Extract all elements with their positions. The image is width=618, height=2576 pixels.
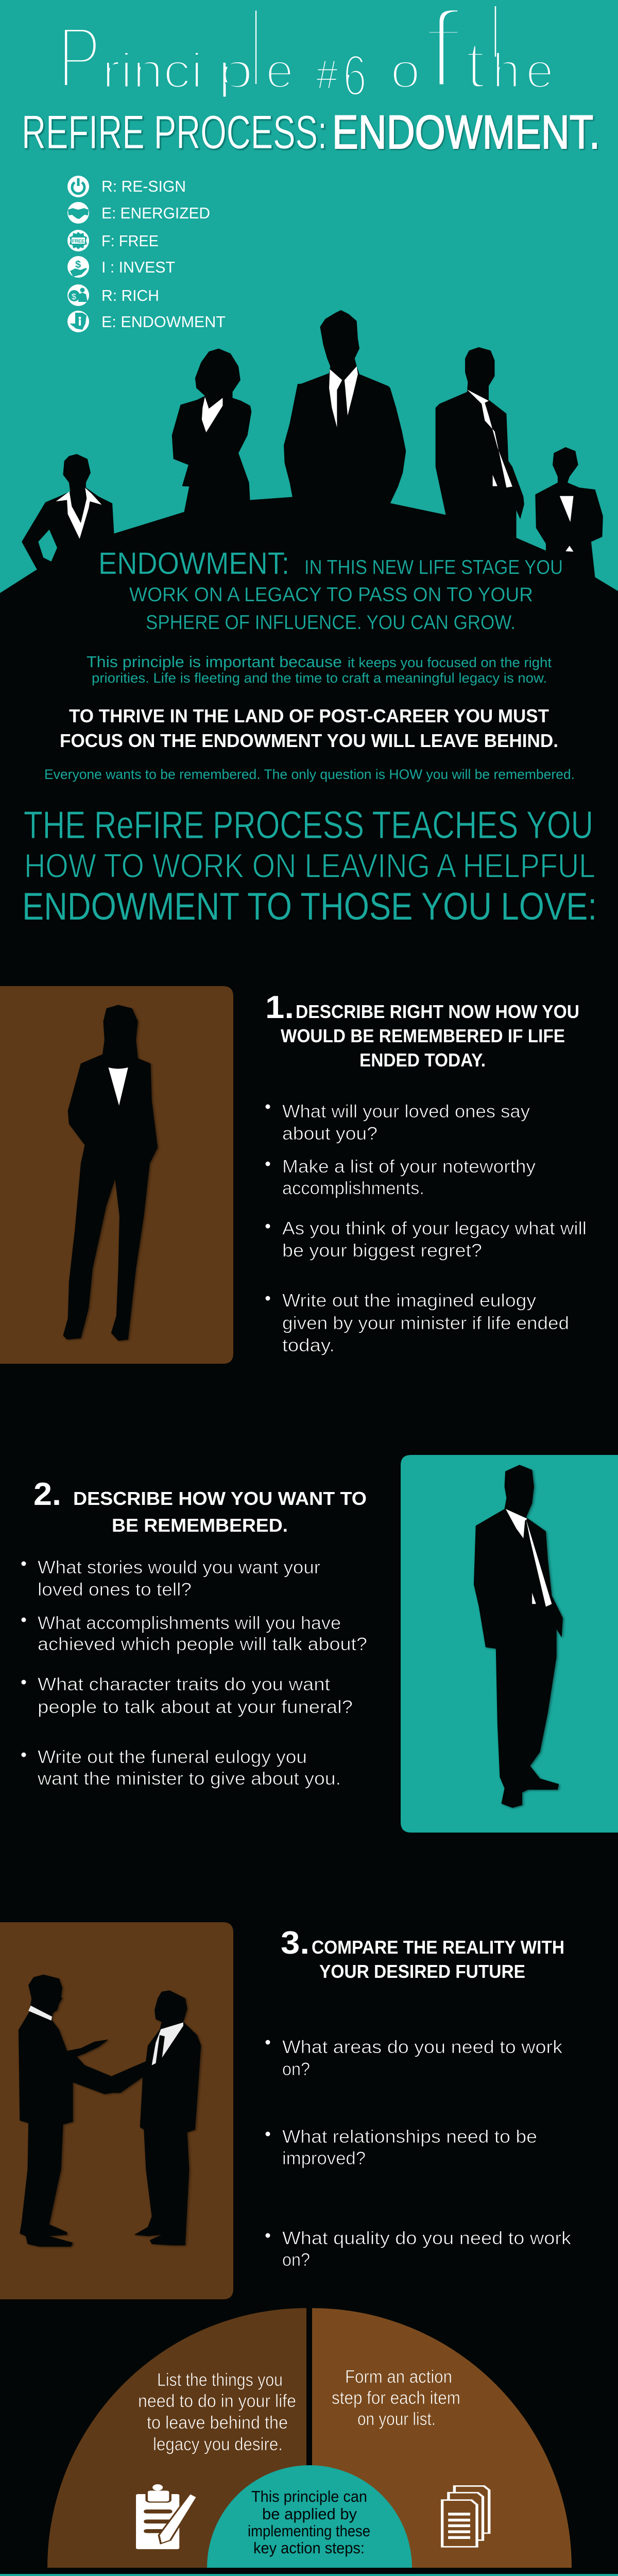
silhouette: man with long tie (436, 347, 524, 546)
icon: dollar and person (67, 284, 89, 306)
text: form an action step: step for each item (332, 2388, 460, 2408)
list: step 2 bullets: What character traits do you want (38, 1674, 330, 1694)
list: step 2 bullets: Write out the funeral eulogy you (38, 1747, 307, 1767)
text: list the things you need to do: List the things you (157, 2370, 283, 2390)
icon: handshake (67, 202, 89, 224)
title: Principle #6 of the: P (58, 9, 101, 107)
icon: hand holding person (67, 311, 89, 332)
section: step 1 text (265, 990, 587, 1355)
section: step 2 text (22, 1477, 367, 1789)
list: step 1 bullets: about you? (282, 1124, 377, 1144)
illustration: business people standing on a dome (0, 310, 618, 633)
footer bar (0, 2574, 618, 2576)
silhouette: central man (284, 310, 406, 503)
callout: thrive in post-career: TO THRIVE IN THE LAND OF POST-CAREER YOU MUST (69, 705, 549, 726)
list: step 1 bullets: Make a list of your noteworthy (282, 1157, 536, 1177)
title: Principle #6 of the: rinci (102, 43, 203, 98)
list: the six ReFIRE principles (67, 176, 226, 332)
text: list the things you need to do (138, 2370, 296, 2454)
title: ReFire Process: Endowment: REFIRE PROCESS: (22, 106, 327, 159)
title: Principle #6 of the: o (390, 43, 420, 98)
heading: step 1: WOULD BE REMEMBERED IF LIFE (281, 1025, 565, 1046)
list: step 3 bullets: on? (282, 2250, 310, 2270)
text: definition line two: WORK ON A LEGACY TO PASS ON TO YOUR (129, 584, 533, 606)
list: step 1 bullets: be your biggest regret? (282, 1241, 482, 1261)
label: Re-sign: R: RE-SIGN (101, 177, 186, 195)
silhouette: two men shaking hands (19, 1975, 201, 2247)
heading: step 2: DESCRIBE HOW YOU WANT TO (73, 1488, 367, 1509)
text: everyone wants to be remembered: Everyone wants to be remembered. The only question is HOW you will be remembered. (44, 767, 575, 782)
title: Principle #6 of the: e (266, 43, 294, 98)
silhouette: standing man with tie (474, 1465, 563, 1808)
list: step 1 bullets (266, 1101, 587, 1355)
heading: Endowment: ENDOWMENT: (98, 546, 289, 581)
list: step 1 bullets: Write out the imagined eulogy (282, 1291, 537, 1311)
silhouette: left woman (22, 454, 114, 570)
list: step 3 bullets (266, 2037, 572, 2270)
text: this principle can be applied: key action steps: (253, 2539, 365, 2557)
text: this principle can be applied: This principle can (251, 2487, 367, 2505)
text: definition line one: IN THIS NEW LIFE STAGE YOU (304, 556, 563, 579)
section: step 3 text (266, 1925, 572, 2270)
text: this principle can be applied: implementing these (248, 2522, 370, 2540)
icon: power button (67, 176, 89, 197)
chart: action steps dome (47, 2308, 572, 2568)
title: Principle #6 of the: h (492, 43, 520, 98)
text: this principle can be applied: be applied by (262, 2505, 357, 2523)
text: definition line three: SPHERE OF INFLUENCE. YOU CAN GROW. (146, 612, 516, 634)
list: step 1 bullets: As you think of your legacy what will (282, 1218, 587, 1239)
title: Principle #6 of the: p (217, 43, 253, 98)
list: step 1 bullets: accomplishments. (282, 1178, 424, 1198)
heading: step 3 (281, 1925, 564, 1982)
title: Principle #6 of the: t (466, 27, 485, 102)
title: Principle #6 of the: e (526, 43, 554, 98)
list: step 1 bullets: today. (282, 1335, 335, 1355)
label: Free: F: FREE (101, 232, 159, 250)
callout: thrive in post-career (60, 705, 558, 751)
icon: free badge (67, 230, 89, 251)
list: step 2 bullets: want the minister to give about you. (37, 1769, 341, 1789)
callout: thrive in post-career: FOCUS ON THE ENDOWMENT YOU WILL LEAVE BEHIND. (60, 730, 558, 751)
label: Energized: E: ENERGIZED (101, 204, 210, 222)
text: why this principle is important (87, 653, 552, 686)
list: step 1 bullets: What will your loved ones say (282, 1101, 530, 1122)
label: Invest: I : INVEST (101, 258, 175, 276)
text: form an action step: Form an action (345, 2367, 452, 2387)
heading: step 1 (265, 990, 579, 1071)
icon: stack of documents (442, 2486, 489, 2547)
list: step 2 bullets: achieved which people will talk about? (38, 1634, 367, 1654)
list: step 3 bullets: improved? (282, 2148, 366, 2168)
text: list the things you need to do: to leave behind the (147, 2413, 288, 2433)
heading: step 2 (33, 1477, 367, 1536)
list: step 2 bullets (22, 1557, 367, 1789)
text: form an action step: on your list. (357, 2409, 436, 2429)
heading: step 1: ENDED TODAY. (359, 1049, 486, 1071)
heading: the ReFIRE process teaches you (22, 803, 597, 928)
icon: dollar and person: $ (72, 293, 76, 301)
panel: teal header background (0, 0, 618, 603)
list: step 3 bullets: What quality do you need to work (282, 2228, 572, 2248)
panel: step 2 image (401, 1455, 618, 1833)
label: Rich: R: RICH (101, 286, 159, 304)
list: step 2 bullets: What accomplishments will you have (38, 1613, 341, 1633)
list: step 2 bullets: people to talk about at your funeral? (38, 1697, 353, 1717)
silhouette: standing woman (63, 1005, 158, 1341)
icon: free badge: FREE (72, 239, 84, 244)
icon: hand with dollar: $ (75, 259, 81, 270)
panel: teal semicircle (207, 2465, 412, 2568)
list: step 3 bullets: What relationships need to be (282, 2127, 537, 2147)
heading: step 3: COMPARE THE REALITY WITH (312, 1937, 564, 1958)
title: Principle #6 of the: # (316, 52, 338, 97)
heading: step 1: DESCRIBE RIGHT NOW HOW YOU (296, 1001, 579, 1022)
heading: step 3: YOUR DESIRED FUTURE (319, 1961, 525, 1982)
text: list the things you need to do: need to do in your life (138, 2391, 296, 2411)
text: why this principle is important: it keeps you focused on the right (348, 655, 552, 670)
silhouette: right woman (535, 447, 603, 585)
text: why this principle is important: priorities. Life is fleeting and the time to craft a meaningful legacy is now. (92, 670, 547, 686)
list: step 3 bullets: on? (282, 2059, 310, 2079)
list: step 1 bullets: given by your minister if life ended (282, 1313, 569, 1333)
panel: step 1 image (0, 986, 233, 1364)
heading: step 3: 3. (281, 1925, 310, 1961)
section: endowment definition (98, 546, 563, 634)
text: form an action step (332, 2367, 460, 2429)
dome (0, 497, 618, 633)
icon: hand with dollar (67, 256, 89, 278)
title: Principle #6 of the (58, 0, 554, 111)
text: list the things you need to do: legacy you desire. (153, 2434, 283, 2454)
icon: clipboard and pencil (136, 2484, 197, 2549)
silhouette: woman with crossed arms (172, 349, 251, 516)
label: Endowment: E: ENDOWMENT (101, 313, 226, 331)
heading: step 2: 2. (33, 1477, 61, 1512)
list: step 2 bullets: loved ones to tell? (38, 1580, 192, 1600)
panel: right half of dome (312, 2308, 572, 2568)
title: Principle #6 of the: 6 (343, 43, 367, 108)
text: this principle can be applied (248, 2487, 370, 2557)
list: step 3 bullets: What areas do you need to work (282, 2037, 563, 2057)
heading: step 1: 1. (265, 990, 294, 1025)
text: why this principle is important: This principle is important because (87, 653, 342, 671)
list: step 2 bullets: What stories would you want your (38, 1557, 320, 1578)
panel: step 3 image (0, 1922, 233, 2299)
panel: left half of dome (47, 2308, 306, 2568)
heading: step 2: BE REMEMBERED. (112, 1515, 288, 1536)
